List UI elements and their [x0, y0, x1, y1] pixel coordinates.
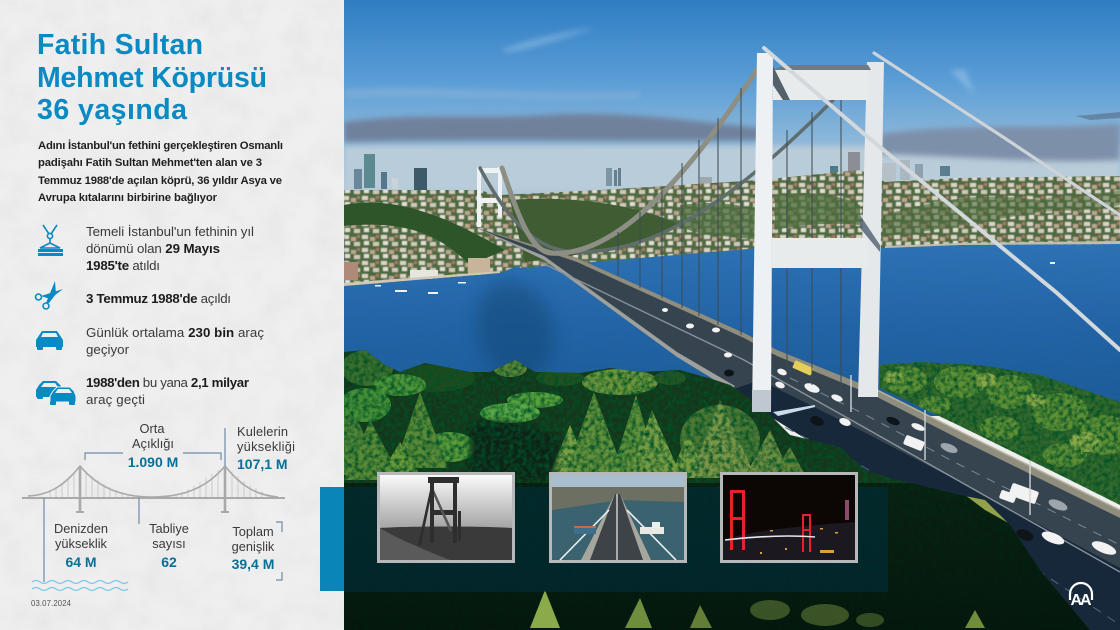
label: total width: genişlik — [232, 539, 275, 554]
label: deck count — [149, 521, 189, 570]
clouds — [344, 28, 1120, 191]
thumbnail: bridge under construction — [377, 472, 515, 563]
list item: daily traffic — [86, 325, 264, 357]
dark teal overlay band — [344, 487, 888, 592]
title: Mehmet Köprüsü — [37, 62, 267, 94]
paper background — [0, 0, 344, 630]
label: central span: Orta — [140, 421, 165, 436]
thumbnail: bridge deck from above — [549, 472, 687, 563]
boats — [375, 262, 1055, 294]
title: Fatih Sultan — [37, 29, 203, 61]
sky — [344, 0, 1120, 200]
list item: opening: 3 Temmuz 1988'de açıldı — [86, 291, 231, 306]
list item: foundation: Temeli İstanbul'un fethinin yıl — [86, 224, 254, 239]
label: tower height: 107,1 M — [237, 456, 288, 472]
intro text block: padişahı Fatih Sultan Mehmet'ten alan ve 3 — [38, 157, 262, 169]
intro text block: Avrupa kıtalarını birbirine bağlıyor — [38, 192, 218, 204]
diagram hangers — [50, 470, 268, 498]
label: tower height: Kulelerin — [237, 424, 288, 439]
panel: photo of the bridge — [325, 0, 1120, 630]
label: central span: Açıklığı — [132, 436, 174, 451]
label: total width: Toplam — [232, 524, 274, 539]
thumbnail: bridge lit red at night — [720, 472, 858, 563]
hanger cables — [618, 88, 841, 395]
far shore with houses, right — [502, 170, 1120, 268]
shaded gap between tree crowns — [470, 421, 560, 482]
label: deck count: Tabliye — [149, 521, 189, 536]
vehicles — [662, 308, 1118, 558]
icon: two cars — [36, 381, 76, 405]
list item: total traffic — [86, 375, 249, 407]
intro text block — [38, 139, 283, 204]
title: 36 yaşında — [37, 94, 188, 126]
lamp posts — [851, 375, 1042, 515]
logo: AA — [1070, 583, 1092, 609]
list item: total traffic: 1988'den bu yana 2,1 milyar — [86, 375, 249, 390]
label: height above sea: Denizden — [54, 521, 108, 536]
label: deck count: 62 — [161, 554, 177, 570]
road deck — [477, 228, 1120, 630]
date: 03.07.2024 — [31, 599, 72, 608]
photo thumbnails — [377, 472, 858, 563]
far tower — [477, 167, 502, 227]
logo: AA: AA — [1070, 592, 1092, 609]
label: tower height — [237, 424, 295, 472]
backstay cables — [764, 48, 1120, 350]
diagram cables, deck and towers — [22, 466, 285, 512]
label: height above sea: 64 M — [65, 554, 97, 570]
left shore with houses — [344, 190, 520, 286]
list item: daily traffic: geçiyor — [86, 342, 130, 357]
label: height above sea — [54, 521, 108, 570]
label: height above sea: yükseklik — [55, 536, 108, 551]
list item: foundation date: dönümü olan 29 Mayıs — [86, 241, 220, 256]
panel: left information panel — [0, 0, 344, 630]
list item: total traffic: araç geçti — [86, 392, 145, 407]
label: total width: 39,4 M — [232, 556, 274, 572]
label: central span: 1.090 M — [128, 454, 178, 470]
near bridge tower — [752, 53, 884, 412]
diagram leader lines — [44, 428, 282, 582]
water waves — [32, 580, 128, 590]
foreground trees — [325, 345, 1104, 630]
icon: scissors — [36, 281, 63, 309]
skyline buildings — [354, 152, 950, 191]
intro text block: Adını İstanbul'un fethini gerçekleştiren Osmanlı — [38, 139, 283, 152]
label: total width — [232, 524, 275, 572]
blue accent block — [320, 487, 344, 591]
label: central span — [128, 421, 178, 470]
title — [37, 29, 267, 126]
main suspension cables, rear and front — [480, 68, 833, 253]
water — [344, 236, 1120, 416]
label: tower height: yüksekliği — [237, 439, 295, 454]
label: deck count: sayısı — [152, 536, 186, 551]
list item: daily traffic: Günlük ortalama 230 bin araç — [86, 325, 264, 340]
icon: crane hook lifting a deck piece — [38, 225, 63, 256]
right tree area — [880, 360, 1120, 505]
sunlit treetops near the bottom — [530, 488, 1012, 628]
intro text block: Temmuz 1988'de açılan köprü, 36 yıldır Asya ve — [38, 175, 282, 187]
list item: foundation year: 1985'te atıldı — [86, 258, 160, 273]
icon: car — [36, 331, 63, 350]
bridge diagram — [22, 421, 295, 590]
